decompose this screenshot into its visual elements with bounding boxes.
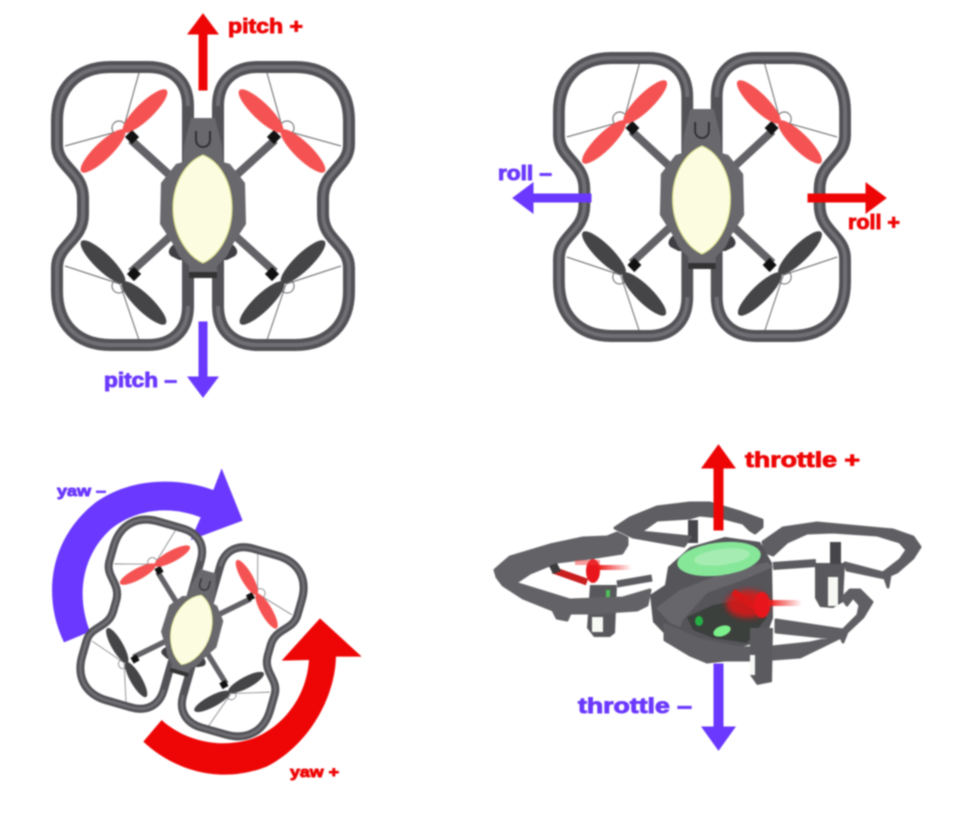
right frame loop xyxy=(763,523,920,587)
label: pitch minus: pitch – xyxy=(104,370,177,392)
label: roll minus: roll – xyxy=(498,163,552,185)
panel: pitch xyxy=(57,14,349,397)
label: yaw minus: yaw – xyxy=(57,483,106,500)
left landing leg xyxy=(587,585,617,637)
green underside lights xyxy=(712,623,732,639)
left motor arms xyxy=(617,578,652,584)
green top light xyxy=(675,538,763,580)
arrow: yaw plus xyxy=(143,618,362,775)
drone perspective view xyxy=(495,503,920,685)
label: yaw plus: yaw + xyxy=(290,764,339,781)
front canopy ridge xyxy=(656,562,773,627)
label: roll plus: roll + xyxy=(848,212,900,234)
arrow: roll plus xyxy=(808,183,886,213)
panel: throttle xyxy=(495,445,920,750)
panel: roll xyxy=(498,58,900,336)
front landing leg xyxy=(750,628,773,685)
arrow: throttle minus xyxy=(702,664,735,750)
label: throttle plus: throttle + xyxy=(745,449,860,472)
drone top view: roll xyxy=(559,58,845,336)
arrow: yaw minus xyxy=(52,468,243,642)
underside shade xyxy=(687,600,767,643)
red left motor and arm xyxy=(549,559,632,583)
right landing leg xyxy=(814,542,863,608)
rear motor and propeller xyxy=(660,520,735,543)
label: pitch plus: pitch + xyxy=(228,16,303,38)
red front motor and arm xyxy=(726,590,802,618)
drone top view: yaw xyxy=(72,512,312,744)
right motor arm xyxy=(773,563,816,566)
central body xyxy=(650,537,773,660)
front right loop band xyxy=(665,590,872,662)
left frame loop xyxy=(495,533,650,620)
arrow: pitch plus xyxy=(188,14,218,90)
rear frame loop xyxy=(615,503,762,546)
label: throttle minus: throttle – xyxy=(578,695,692,718)
arrow: throttle plus xyxy=(702,445,735,530)
panel: yaw xyxy=(52,468,362,781)
arrow: pitch minus xyxy=(188,322,218,397)
drone top view: pitch xyxy=(57,67,349,345)
arrow: roll minus xyxy=(513,183,591,213)
